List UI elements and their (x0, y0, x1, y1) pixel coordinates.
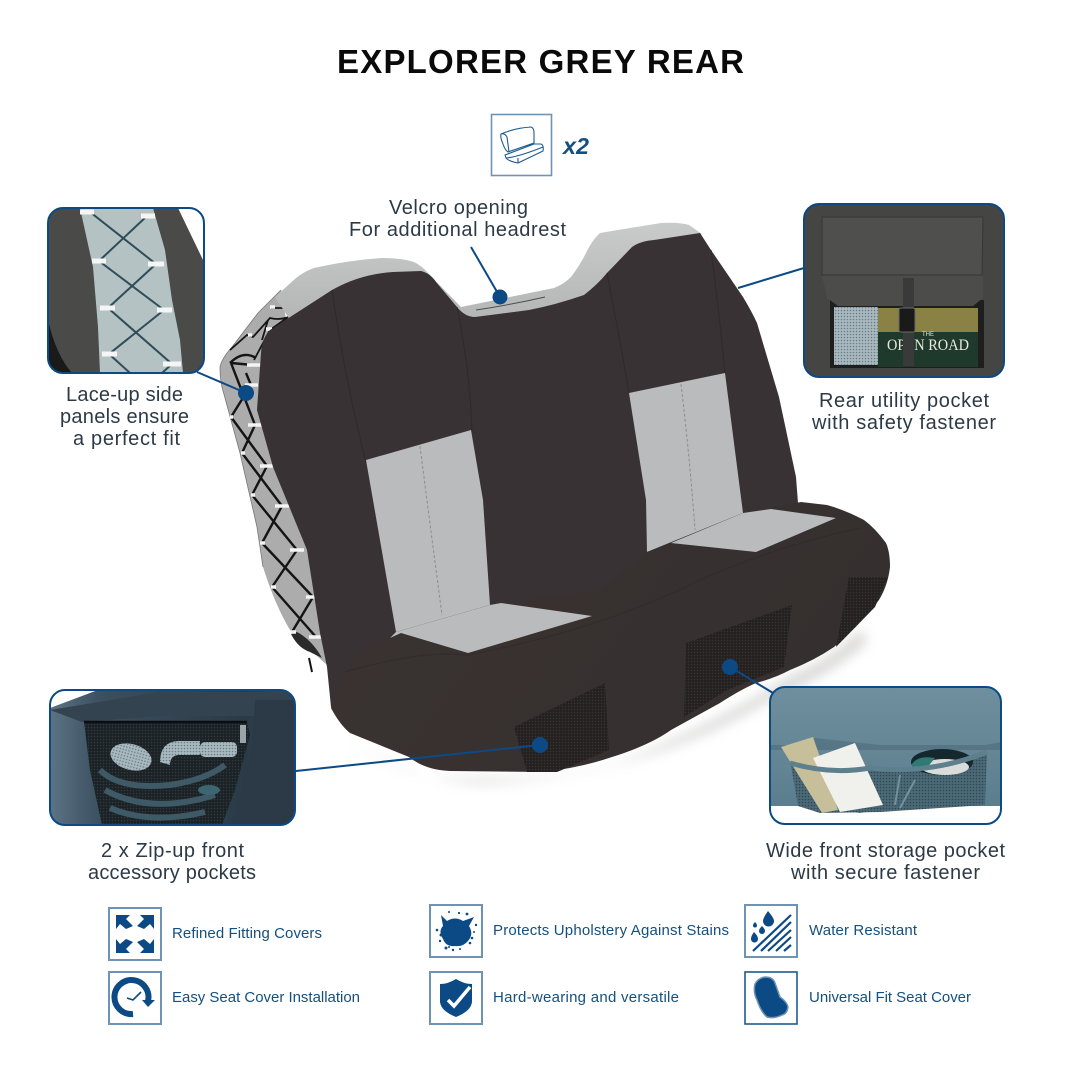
icon: clock with arrow (109, 972, 161, 1024)
callout: wide front storage pocket (722, 659, 1005, 884)
callout text: Velcro opening (389, 197, 528, 219)
feature: universal fit (745, 972, 971, 1024)
callout: velcro opening (349, 197, 566, 304)
callout: rear utility pocket (738, 204, 1004, 434)
lace-up side panel (220, 290, 340, 672)
icon: splatter (430, 905, 482, 957)
feature text: Easy Seat Cover Installation (172, 989, 360, 1006)
seat cover product illustration (220, 223, 890, 784)
callout text: 2 x Zip-up front (101, 840, 244, 862)
feature text: Hard-wearing and versatile (493, 989, 679, 1006)
left grey panel (366, 430, 490, 632)
callout text (811, 390, 996, 434)
callout text (766, 840, 1005, 884)
velcro seam (476, 297, 545, 310)
photo inset: utility pocket: OPEN ROAD (887, 337, 969, 354)
photo inset: utility pocket (804, 204, 1004, 377)
feature: hard-wearing (430, 972, 679, 1024)
cushion crease (345, 528, 860, 672)
back seams (332, 250, 725, 462)
left seat grey inset (390, 603, 592, 653)
callout text: For additional headrest (349, 219, 566, 241)
callout text: Rear utility pocket (819, 390, 989, 412)
callout text: accessory pockets (88, 862, 256, 884)
feature: easy installation (109, 972, 360, 1024)
callout text: panels ensure (60, 406, 189, 428)
feature: protects against stains (430, 905, 729, 957)
grey headrest band (275, 223, 702, 322)
photo inset: lacing (48, 208, 204, 373)
leader line (738, 268, 804, 288)
centre storage mesh pocket (684, 605, 792, 717)
ground shadow (335, 630, 868, 784)
photo inset: zip pocket (50, 690, 295, 825)
feature text: Protects Upholstery Against Stains (493, 922, 729, 939)
callout: zip-up accessory pockets (50, 690, 548, 884)
icon: drops and diagonal lines (745, 905, 797, 957)
leader line and dot (722, 659, 773, 693)
feature text: Universal Fit Seat Cover (809, 989, 971, 1006)
callout: lace-up side panels (48, 208, 254, 450)
photo inset: storage pocket (770, 687, 1001, 824)
quantity text: x2 (561, 133, 589, 159)
leader line and dot (296, 737, 548, 771)
right grey panel (629, 373, 743, 552)
callout text: with safety fastener (811, 412, 996, 434)
quantity indicator: two rear seat covers (492, 114, 589, 176)
callout text (60, 384, 189, 450)
icon: shield with tick (430, 972, 482, 1024)
title: EXPLORER GREY REAR (337, 43, 744, 80)
right seat grey inset (671, 509, 836, 552)
left accessory mesh pocket (514, 683, 609, 772)
callout text: Lace-up side (66, 384, 183, 406)
seat back (257, 233, 798, 707)
leader line and dot (197, 372, 254, 401)
leader line and dot (471, 247, 508, 304)
callout text: with secure fastener (790, 862, 980, 884)
feature: refined fitting covers (109, 908, 322, 960)
feature text: Refined Fitting Covers (172, 925, 322, 942)
callout text: a perfect fit (73, 428, 180, 450)
right accessory mesh pocket (836, 577, 888, 647)
callout text (349, 197, 566, 241)
feature text: Water Resistant (809, 922, 918, 939)
photo inset: utility pocket: THE (922, 332, 934, 338)
callout text: Wide front storage pocket (766, 840, 1005, 862)
callout text (88, 840, 256, 884)
icon: seat silhouette (745, 972, 797, 1024)
icon: outward arrows (109, 908, 161, 960)
feature: water resistant (745, 905, 918, 957)
seat cushion (331, 502, 890, 772)
icon: bench seat (492, 114, 552, 176)
